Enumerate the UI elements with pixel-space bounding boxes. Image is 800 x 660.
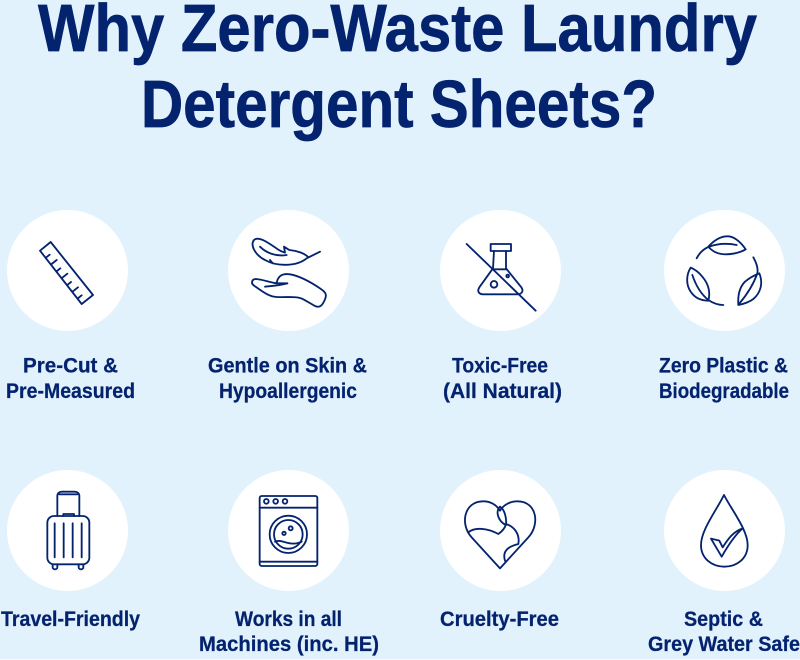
label: machines: Machines (inc. HE)	[199, 633, 379, 656]
label: gentle: Hypoallergenic	[219, 380, 357, 403]
panel: pre-cut	[7, 210, 128, 331]
label: machines	[199, 608, 379, 656]
icon: crossed flask	[467, 244, 536, 311]
icon: washing machine	[260, 496, 317, 566]
icon: suitcase	[47, 492, 89, 569]
label: toxic-free	[443, 354, 562, 403]
label: pre-cut: Pre-Cut &	[23, 354, 118, 378]
label: septic	[648, 608, 800, 656]
label: pre-cut: Pre-Measured	[6, 380, 135, 403]
icon: leaf cycle	[687, 236, 761, 305]
label: gentle	[208, 354, 367, 403]
label: zero plastic: Zero Plastic &	[659, 354, 788, 378]
panel: cruelty-free	[440, 470, 561, 591]
panel: zero plastic	[664, 210, 785, 331]
panel: gentle	[228, 210, 349, 331]
label: septic: Septic &	[684, 608, 763, 631]
label: machines: Works in all	[235, 608, 342, 631]
label: pre-cut	[6, 354, 135, 403]
panel: machines	[228, 470, 349, 591]
title	[38, 0, 757, 142]
label: toxic-free: (All Natural)	[443, 380, 562, 403]
label: cruelty-free: Cruelty-Free	[440, 608, 559, 631]
panel: toxic-free	[440, 210, 561, 331]
label: gentle: Gentle on Skin &	[208, 354, 367, 378]
icon: water drop with check	[701, 495, 748, 567]
label: toxic-free: Toxic-Free	[452, 354, 548, 378]
icon: feather and hand	[252, 239, 326, 307]
icon: ruler	[40, 242, 93, 304]
label: travel: Travel-Friendly	[1, 608, 140, 631]
icon: heart with rabbit	[465, 501, 535, 568]
panel: septic	[664, 470, 785, 591]
panel: travel	[7, 470, 128, 591]
title: Detergent Sheets?	[141, 67, 657, 142]
label: zero plastic	[659, 354, 789, 403]
